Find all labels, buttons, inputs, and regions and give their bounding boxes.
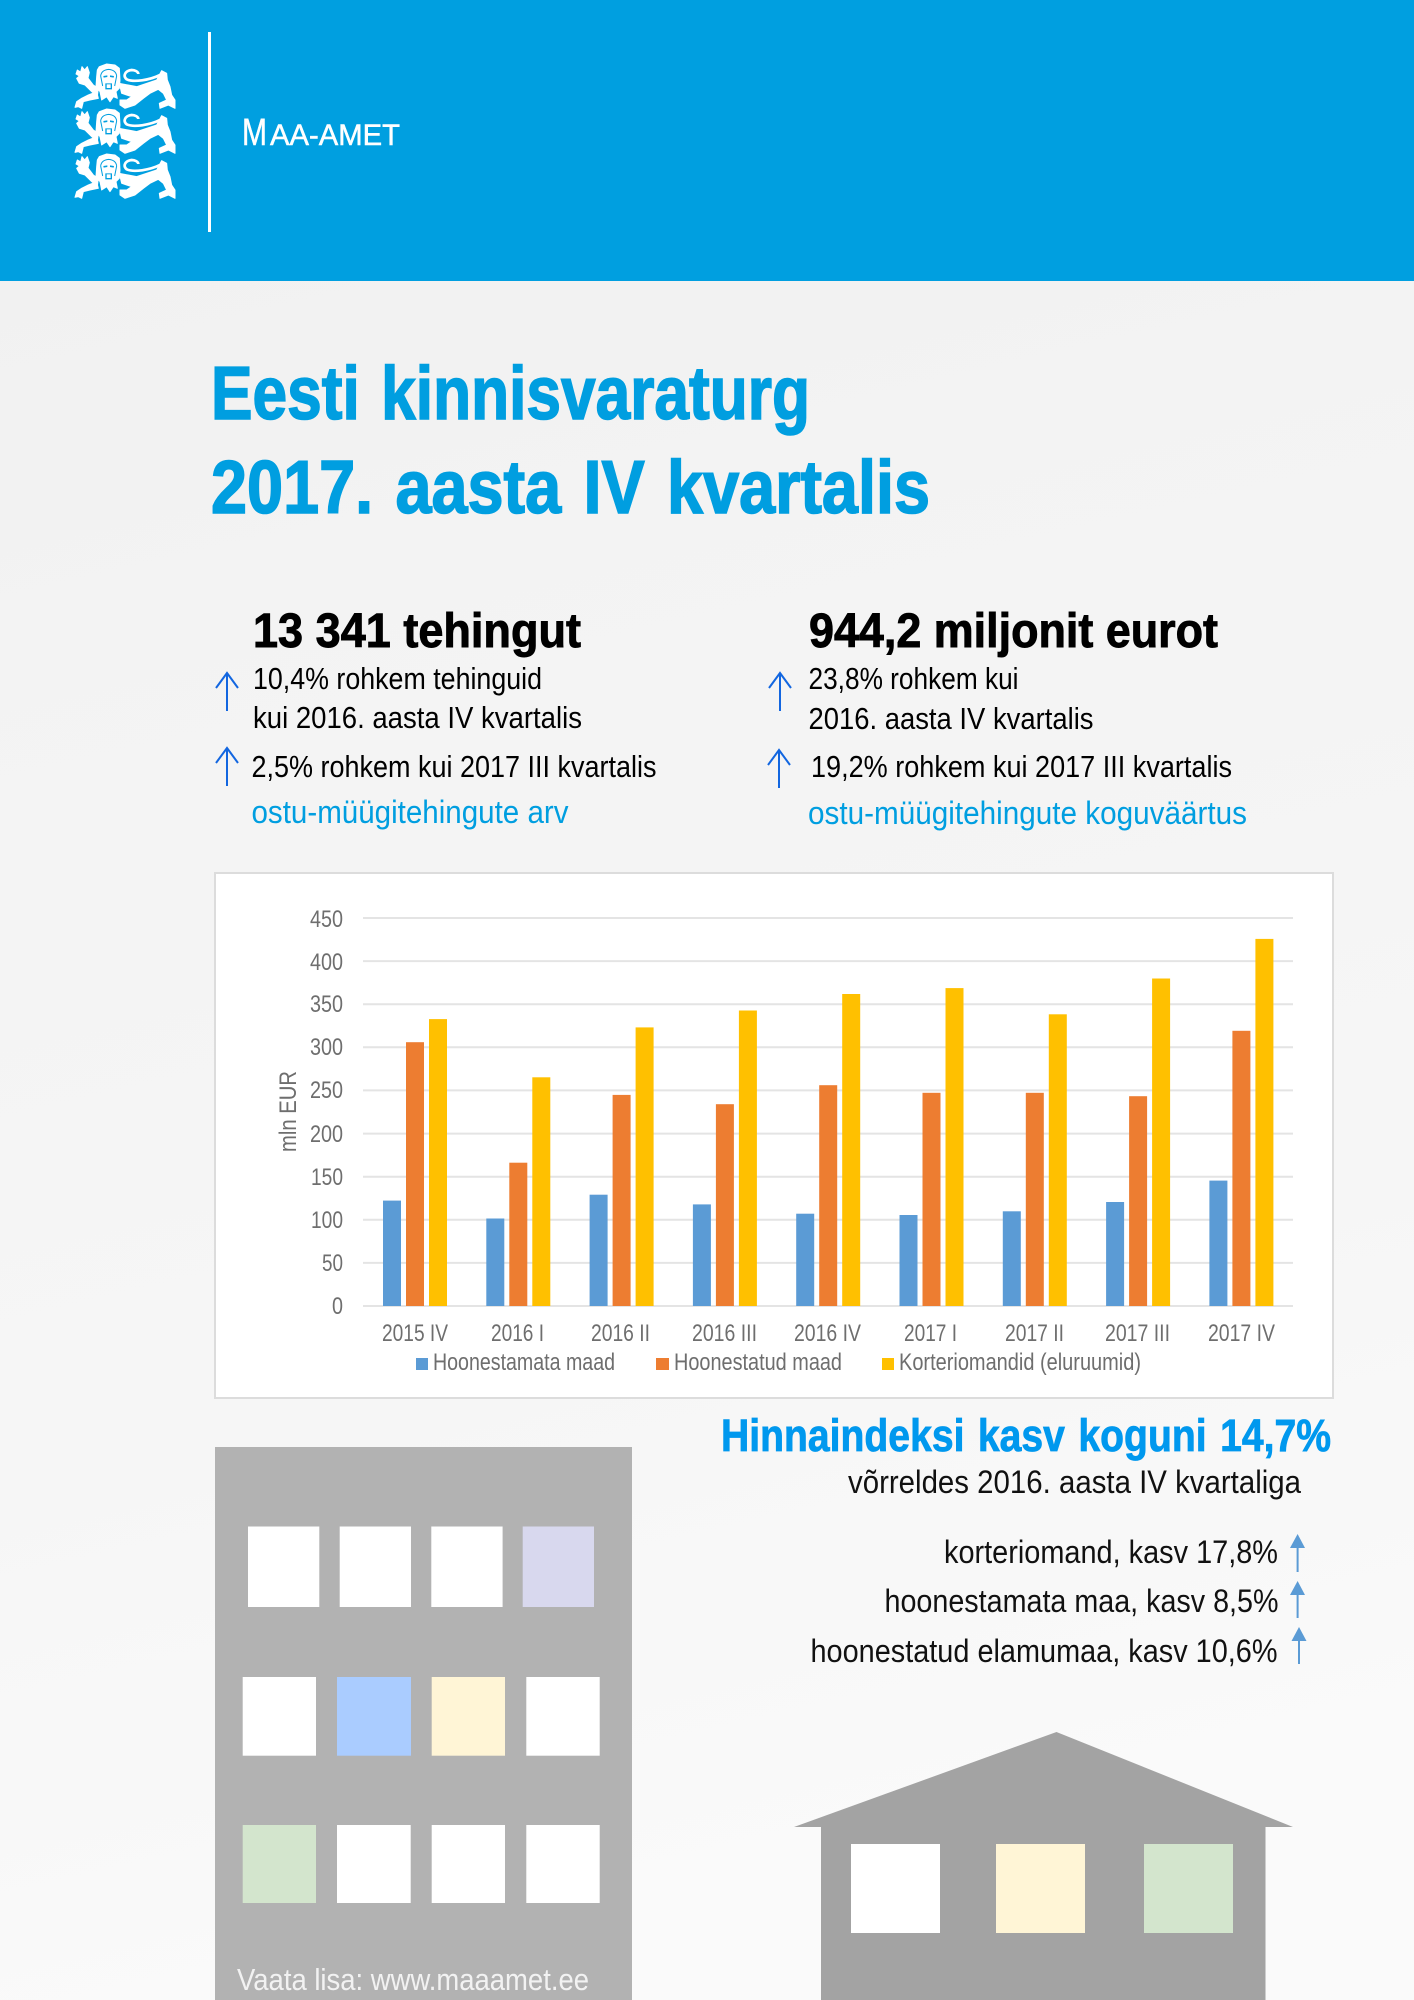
bars: Hoonestatud maad: [406, 1031, 1250, 1306]
heading: price index: Hinnaindeksi kasv koguni 14,7%: [721, 1410, 1331, 1461]
text: yearly change: [808, 661, 1094, 736]
y axis title: mln EUR: [275, 1071, 302, 1152]
y axis labels: 450: [310, 906, 343, 933]
legend: Korteriomandid (eluruumid): [899, 1349, 1141, 1376]
x axis labels: 2016 I: [491, 1320, 544, 1347]
list row: apartment: korteriomand, kasv 17,8%: [944, 1534, 1278, 1570]
arrow up: [1290, 1534, 1305, 1572]
illustration: house: [794, 1732, 1293, 2000]
y axis labels: 400: [310, 949, 343, 976]
panel: bar chart: [215, 873, 1333, 1398]
link text: Vaata lisa: www.maaamet.ee: [237, 1962, 589, 1997]
arrow up: [768, 750, 790, 788]
organisation name: [242, 112, 400, 154]
y axis labels: 350: [310, 991, 343, 1018]
arrow up: [216, 673, 238, 711]
y axis labels: 0: [332, 1293, 343, 1320]
header band: [0, 0, 1414, 281]
heading: value: 944,2 miljonit eurot: [809, 605, 1218, 658]
arrow up: [1290, 1581, 1305, 1618]
y axis labels: 150: [311, 1164, 343, 1191]
panel: total value: [768, 605, 1247, 831]
x axis labels: 2017 III: [1105, 1320, 1170, 1347]
list row: unbuilt land: hoonestamata maa, kasv 8,5%: [884, 1583, 1278, 1619]
y axis labels: 100: [311, 1207, 343, 1234]
panel: price index: [721, 1410, 1331, 1669]
x axis labels: 2016 IV: [794, 1320, 861, 1347]
bars: Hoonestamata maad: [383, 1181, 1227, 1306]
y axis labels: 300: [310, 1034, 343, 1061]
organisation name: M: [242, 112, 267, 154]
text: yearly change: 23,8% rohkem kui: [808, 661, 1018, 696]
y axis labels: 250: [310, 1077, 343, 1104]
y axis labels: 50: [322, 1250, 343, 1277]
text: yearly change: kui 2016. aasta IV kvartalis: [253, 700, 582, 735]
panel: transactions count: [216, 605, 656, 830]
title: 2017. aasta IV kvartalis: [211, 445, 930, 529]
subheading: võrreldes 2016. aasta IV kvartaliga: [848, 1464, 1301, 1500]
legend: [416, 1349, 1141, 1376]
bars: Korteriomandid: [429, 939, 1273, 1306]
x axis labels: [382, 1320, 1275, 1347]
x axis labels: 2017 II: [1005, 1320, 1064, 1347]
caption: ostu-müügitehingute arv: [252, 794, 568, 830]
y axis labels: [310, 906, 343, 1320]
title: [211, 351, 930, 529]
text: quarterly change: 19,2% rohkem kui 2017 III kvartalis: [811, 749, 1232, 784]
arrow up: [1292, 1627, 1306, 1664]
illustration: apartment building: [215, 1447, 632, 2000]
list row: built land: hoonestatud elamumaa, kasv 10,6%: [810, 1633, 1278, 1669]
arrow up: [769, 673, 791, 711]
text: yearly change: 10,4% rohkem tehinguid: [253, 661, 542, 696]
x axis labels: 2017 IV: [1208, 1320, 1275, 1347]
title: Eesti kinnisvaraturg: [211, 351, 810, 435]
logo: three lions: [75, 64, 175, 198]
text: yearly change: [253, 661, 582, 735]
y axis labels: 200: [310, 1121, 343, 1148]
organisation name: AA-AMET: [270, 119, 400, 152]
x axis labels: 2015 IV: [382, 1320, 448, 1347]
x axis labels: 2016 II: [591, 1320, 650, 1347]
x axis labels: 2016 III: [692, 1320, 757, 1347]
legend: Hoonestatud maad: [674, 1349, 842, 1376]
caption: ostu-müügitehingute koguväärtus: [808, 795, 1247, 831]
legend: Hoonestamata maad: [433, 1349, 615, 1376]
heading: transactions: 13 341 tehingut: [253, 605, 581, 658]
text: quarterly change: 2,5% rohkem kui 2017 III kvartalis: [252, 749, 656, 784]
x axis labels: 2017 I: [904, 1320, 957, 1347]
arrow up: [216, 748, 238, 786]
text: yearly change: 2016. aasta IV kvartalis: [808, 701, 1094, 736]
